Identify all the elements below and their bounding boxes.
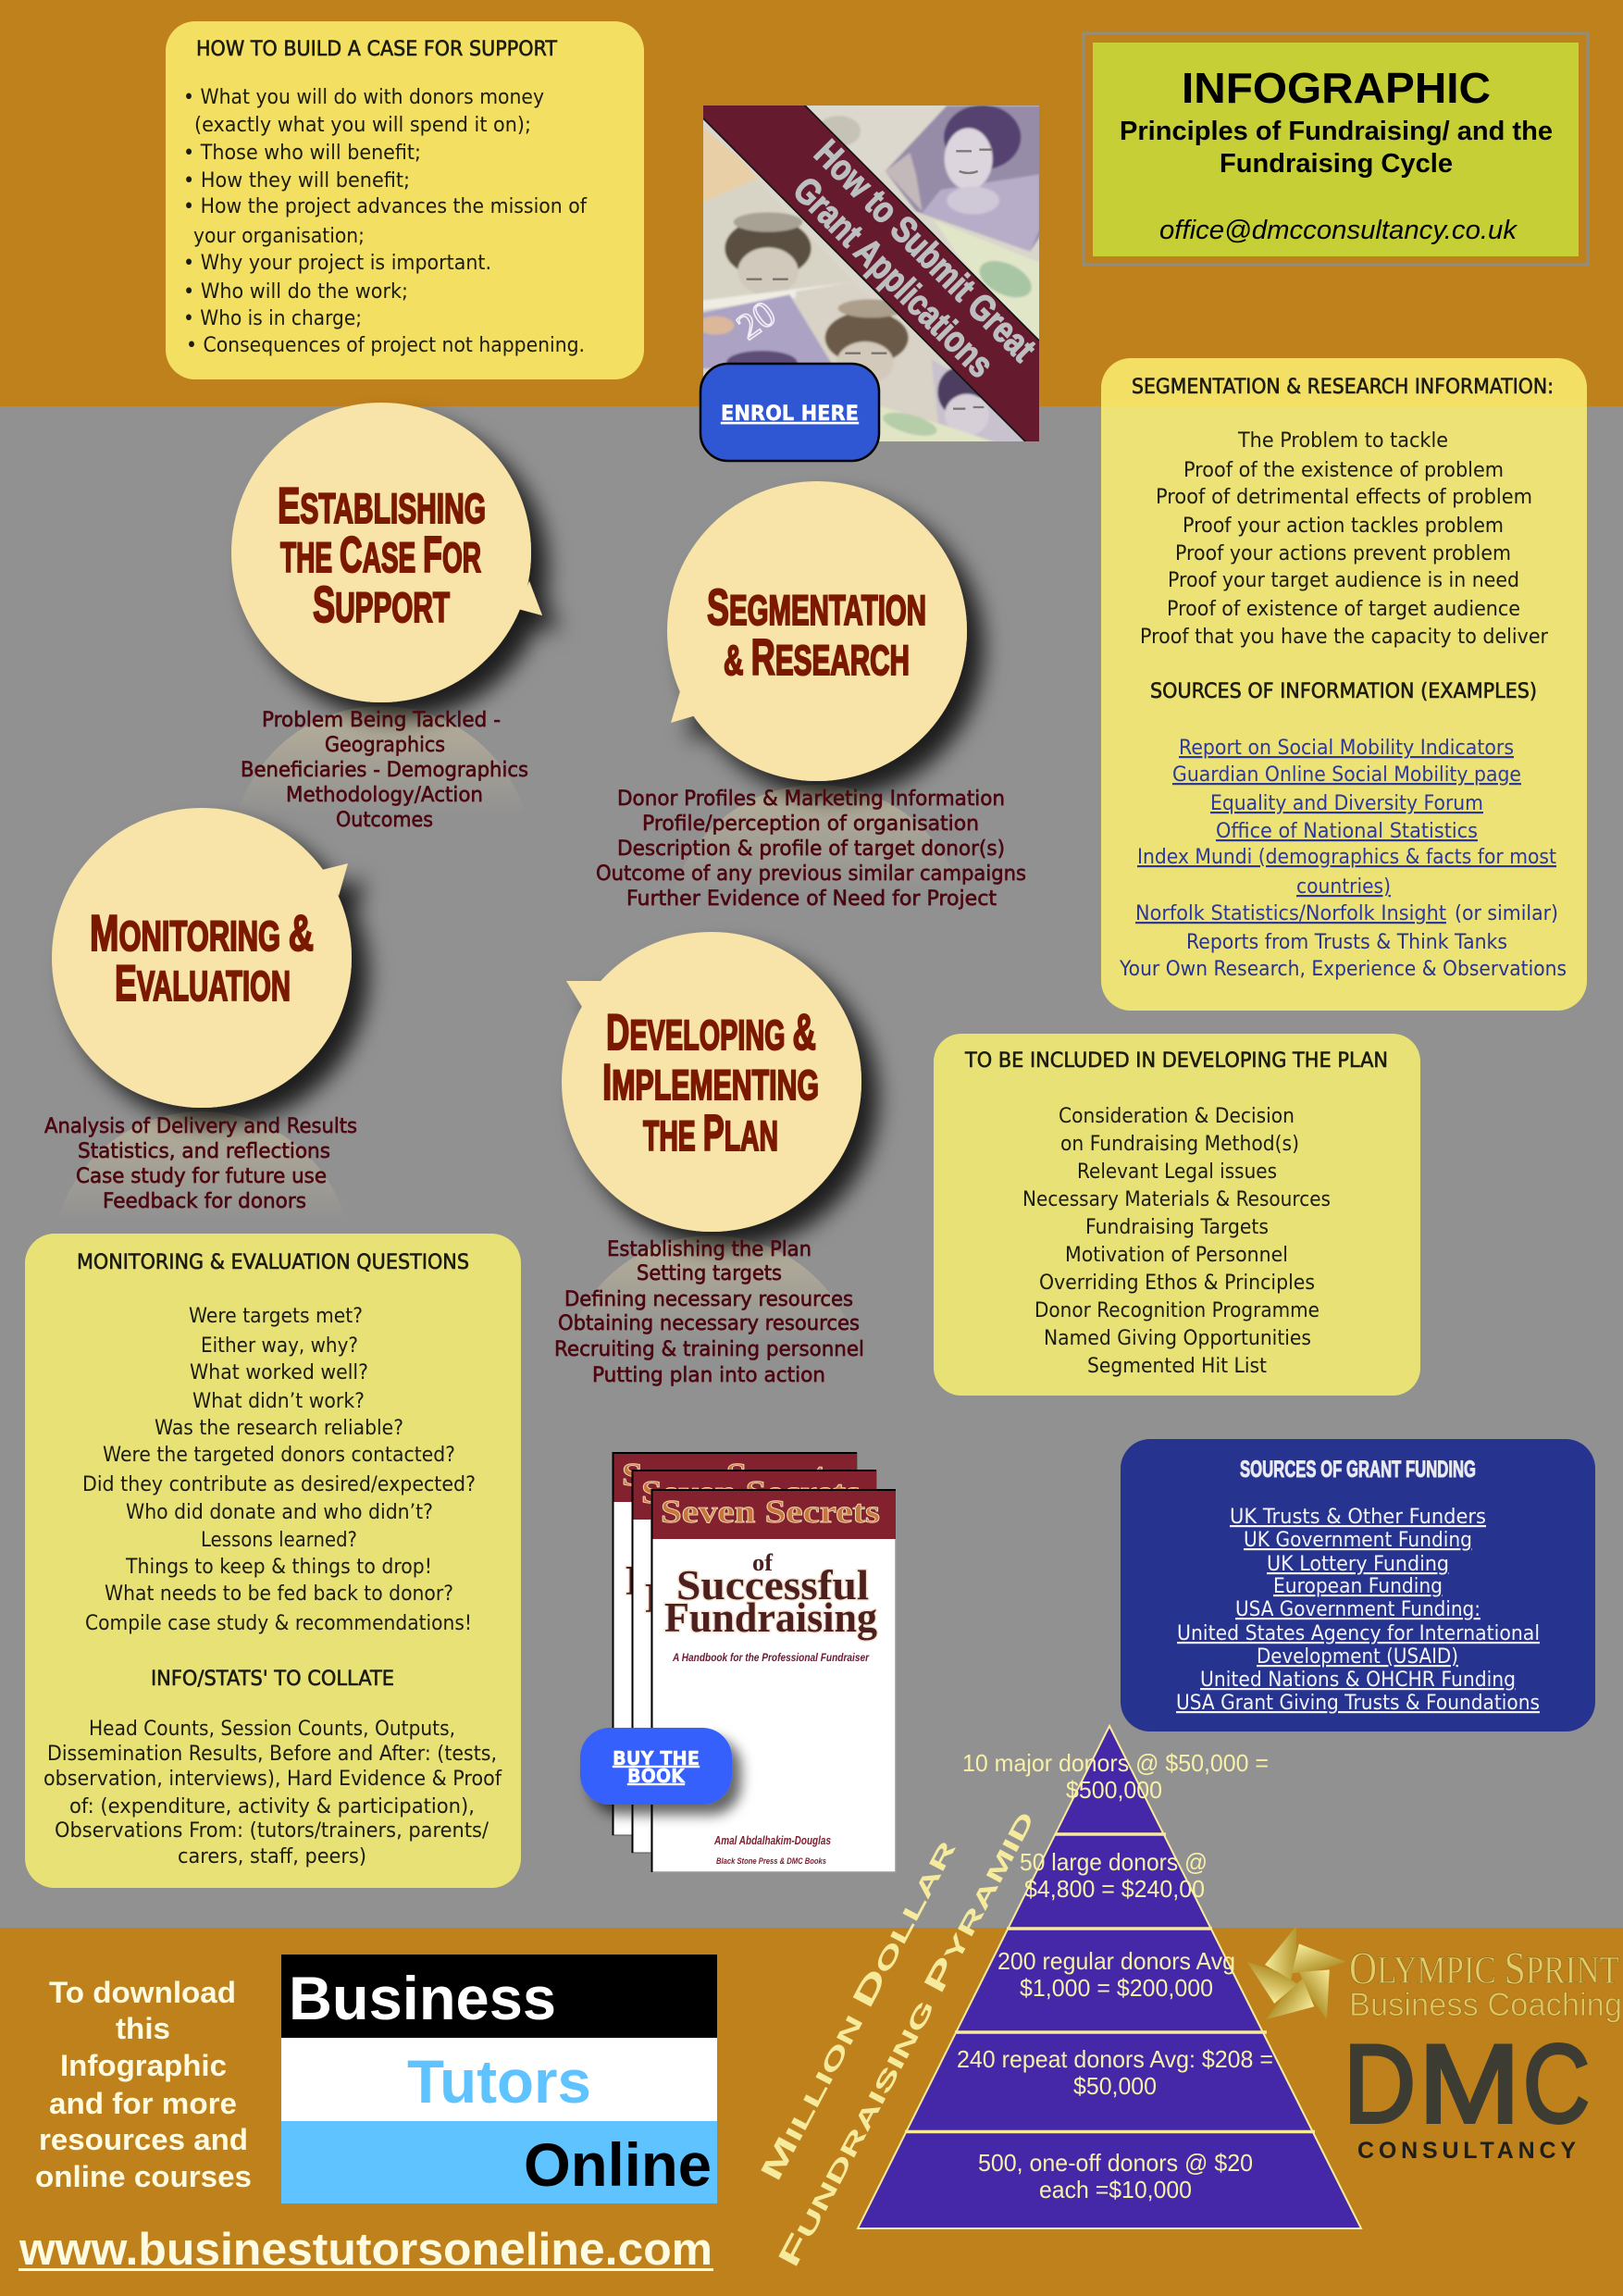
bullet list: • Who is in charge; [183, 307, 362, 330]
bubble title: SUPPORT [313, 576, 450, 633]
letter M: M [1419, 2022, 1520, 2146]
reflection: monitoring circle [52, 1111, 352, 1411]
stats paragraph: Dissemination Results, Before and After: (tests, [47, 1743, 497, 1766]
sources links: Equality and Diversity Forum [1210, 792, 1483, 815]
tier labels: $1,000 = $200,000 [1020, 1974, 1213, 2002]
tier labels: $50,000 [1073, 2072, 1157, 2100]
panel: sources of grant funding [1121, 1439, 1595, 1731]
course image: banknotes with maroon banner [697, 103, 1044, 446]
bubble title [602, 1003, 819, 1161]
questions list: Who did donate and who didn’t? [126, 1501, 433, 1524]
button: enrol here: ENROL HERE [721, 403, 859, 426]
download call to action: To download [49, 1976, 236, 2009]
speech bubble: establishing the case for support [231, 403, 542, 702]
panel heading: TO BE INCLUDED IN DEVELOPING THE PLAN [964, 1049, 1388, 1073]
caption: monitoring and evaluation: Feedback for donors [103, 1190, 306, 1213]
sources heading: SOURCES OF INFORMATION (EXAMPLES) [1150, 680, 1537, 703]
consultancy wordmark: CONSULTANCY [1357, 2138, 1576, 2164]
sources links: Report on Social Mobility Indicators [1179, 737, 1514, 760]
caption: monitoring and evaluation: Analysis of Delivery and Results [44, 1115, 357, 1138]
banner text: How to Submit Great [807, 132, 1044, 369]
bubble title [90, 904, 314, 1011]
button: buy the book: BUY THE [613, 1747, 700, 1769]
book cover: front copy: Successful [676, 1561, 869, 1608]
rotated pyramid title [753, 1805, 1041, 2272]
funding links: European Funding [1273, 1575, 1443, 1598]
caption: developing and implementing the plan: Recruiting & training personnel [554, 1338, 864, 1361]
funding links: UK Trusts & Other Funders [1230, 1506, 1486, 1529]
panel: segmentation and research information [1101, 358, 1587, 1011]
caption: establishing the case for support: Problem Being Tackled - [262, 709, 501, 732]
book cover: middle copy: Fundraising [645, 1574, 858, 1621]
questions list: What didn’t work? [192, 1390, 365, 1413]
bubble title: SEGMENTATION [707, 578, 926, 636]
stats paragraph [43, 1718, 502, 1868]
plan list: Donor Recognition Programme [1035, 1299, 1319, 1322]
tier labels: $500,000 [1066, 1776, 1162, 1804]
bubble title: EVALUATION [115, 954, 291, 1011]
book cover: front copy: of [752, 1549, 773, 1576]
caption: developing and implementing the plan: Obtaining necessary resources [558, 1312, 860, 1335]
logo: olympic sprint business coaching [1237, 1926, 1622, 2038]
proof list: Proof your actions prevent problem [1175, 542, 1511, 565]
funding links: Development (USAID) [1257, 1645, 1458, 1669]
download call to action: resources and [39, 2123, 248, 2156]
stats heading: INFO/STATS' TO COLLATE [151, 1668, 394, 1691]
download call to action: and for more [49, 2087, 237, 2120]
proof list: Proof your target audience is in need [1168, 569, 1519, 592]
download call to action: online courses [35, 2160, 252, 2193]
book cover: front copy: Seven Secrets [661, 1494, 880, 1530]
plan list: Consideration & Decision [1059, 1105, 1295, 1128]
panel: monitoring and evaluation questions [25, 1234, 521, 1888]
caption: monitoring and evaluation: Case study for future use [76, 1165, 327, 1188]
funding links: United Nations & OHCHR Funding [1200, 1669, 1516, 1692]
download call to action: this [116, 2012, 170, 2045]
sources links: Index Mundi (demographics & facts for most [1137, 846, 1556, 869]
book cover: front copy: A Handbook for the Professional Fundraiser [672, 1653, 869, 1664]
bullet list: • Those who will benefit; [183, 142, 421, 165]
caption: establishing the case for support: Outcomes [336, 809, 433, 832]
panel: how to build a case for support [166, 21, 644, 379]
banner text: Grant Applications [786, 169, 1001, 386]
caption: segmentation and research: Description & profile of target donor(s) [617, 838, 1005, 861]
questions list: What worked well? [190, 1361, 368, 1384]
caption: monitoring and evaluation: Statistics, and reflections [78, 1140, 330, 1163]
questions list: Either way, why? [201, 1334, 358, 1358]
caption: developing and implementing the plan: Setting targets [637, 1262, 782, 1285]
proof list: Proof your action tackles problem [1183, 515, 1504, 538]
plan list: Overriding Ethos & Principles [1039, 1272, 1315, 1295]
logo: olympic sprint business coaching: Business Coaching [1349, 1987, 1622, 2023]
sources links: (or similar) [1455, 902, 1558, 925]
panel heading: SEGMENTATION & RESEARCH INFORMATION: [1132, 376, 1554, 399]
plan list: Named Giving Opportunities [1044, 1327, 1311, 1350]
reflection: segmentation circle [667, 785, 967, 1085]
caption: monitoring and evaluation [44, 1115, 357, 1213]
funding links: UK Government Funding [1244, 1529, 1472, 1552]
caption: segmentation and research: Profile/perception of organisation [642, 813, 979, 836]
stats paragraph: observation, interviews), Hard Evidence & Proof [43, 1768, 502, 1791]
sources links [1119, 737, 1567, 981]
tier labels: 10 major donors @ $50,000 = [962, 1749, 1269, 1777]
caption: establishing the case for support: Beneficiaries - Demographics [241, 759, 528, 782]
book cover: middle copy [632, 1471, 876, 1853]
book cover: middle copy: Seven Secrets [641, 1474, 861, 1510]
stats paragraph: of: (expenditure, activity & participation), [69, 1795, 475, 1818]
bubble title: MONITORING & [90, 904, 314, 962]
logo: business tutors online: Online [524, 2130, 712, 2199]
background: orange bottom band [0, 1928, 1623, 2296]
proof list: The Problem to tackle [1237, 429, 1448, 453]
book cover: front copy: Fundraising [664, 1594, 877, 1641]
download call to action [35, 1976, 252, 2193]
plan list: on Fundraising Method(s) [1060, 1133, 1299, 1156]
banknote collage [697, 103, 1043, 446]
bullet list: • How the project advances the mission of [183, 195, 588, 218]
book cover: back copy [613, 1453, 857, 1835]
funding links: USA Grant Giving Trusts & Foundations [1176, 1692, 1540, 1715]
bullet list: • Why your project is important. [183, 252, 491, 275]
button: buy the book: BOOK [627, 1765, 686, 1787]
caption: establishing the case for support [241, 709, 528, 832]
caption: developing and implementing the plan: Establishing the Plan [607, 1238, 812, 1261]
reflection: establishing circle [231, 706, 531, 1006]
tier labels [957, 1749, 1273, 2203]
proof list: Proof of the existence of problem [1183, 459, 1504, 482]
sources links: countries) [1296, 875, 1391, 899]
logo: dmc consultancy [1344, 2022, 1590, 2164]
website address: www.businestutorsoneline.com [19, 2225, 712, 2275]
caption: establishing the case for support: Methodology/Action [286, 784, 483, 807]
stats paragraph: Head Counts, Session Counts, Outputs, [89, 1718, 455, 1741]
bullet list: • What you will do with donors money [183, 86, 544, 109]
bubble title: DEVELOPING & [606, 1003, 816, 1061]
questions list: Did they contribute as desired/expected? [82, 1473, 476, 1496]
note details: facial features [747, 150, 992, 409]
book cover: front copy: Amal Abdalhakim-Douglas [713, 1834, 831, 1847]
stats paragraph: carers, staff, peers) [178, 1845, 366, 1868]
subtitle [1120, 117, 1553, 179]
plan list: Motivation of Personnel [1065, 1244, 1288, 1267]
bullet list: • Consequences of project not happening. [186, 334, 585, 357]
icon: gold pinwheel [1237, 1926, 1352, 2038]
proof list: Proof that you have the capacity to deliver [1140, 626, 1549, 649]
rotated pyramid title: MILLION DOLLAR [753, 1834, 962, 2186]
bubble title: THE PLAN [643, 1104, 778, 1161]
proof list: Proof of existence of target audience [1167, 598, 1520, 621]
questions list: Things to keep & things to drop! [125, 1556, 432, 1579]
plan list [1022, 1105, 1331, 1378]
panel: to be included in developing the plan [934, 1034, 1420, 1396]
million dollar pyramid [858, 1726, 1361, 2228]
tier labels: 500, one-off donors @ $20 [978, 2149, 1253, 2177]
bubble title: THE CASE FOR [280, 526, 481, 583]
funding links: UK Lottery Funding [1267, 1553, 1449, 1576]
questions list: What needs to be fed back to donor? [105, 1582, 453, 1606]
questions list: Was the research reliable? [155, 1417, 403, 1440]
logo: business tutors online: Business [289, 1964, 556, 2032]
stats paragraph: Observations From: (tutors/trainers, parents/ [55, 1819, 489, 1843]
plan list: Segmented Hit List [1087, 1355, 1267, 1378]
funding links [1176, 1506, 1540, 1715]
sources links: Reports from Trusts & Think Tanks [1186, 931, 1507, 954]
questions list [82, 1305, 476, 1635]
title panel [1084, 33, 1588, 265]
caption: segmentation and research: Outcome of any previous similar campaigns [596, 863, 1026, 886]
questions list: Lessons learned? [201, 1529, 357, 1552]
title: INFOGRAPHIC [1182, 64, 1491, 112]
maroon banner [703, 105, 1039, 441]
plan list: Relevant Legal issues [1077, 1160, 1277, 1184]
tier labels: $4,800 = $240,00 [1024, 1875, 1205, 1903]
button: buy the book [580, 1728, 732, 1805]
bubble title [707, 578, 926, 686]
tier labels: 50 large donors @ [1020, 1848, 1208, 1876]
panel heading: SOURCES OF GRANT FUNDING [1240, 1457, 1476, 1483]
caption: developing and implementing the plan [554, 1238, 864, 1387]
panel heading: MONITORING & EVALUATION QUESTIONS [77, 1251, 469, 1274]
speech bubble: monitoring and evaluation [52, 808, 352, 1108]
bubble title: IMPLEMENTING [602, 1053, 819, 1111]
sources links: Norfolk Statistics/Norfolk Insight [1135, 902, 1446, 925]
bubble title: & RESEARCH [724, 628, 910, 686]
questions list: Compile case study & recommendations! [85, 1612, 472, 1635]
caption: segmentation and research: Further Evidence of Need for Project [626, 887, 997, 911]
sources links: Guardian Online Social Mobility page [1172, 763, 1521, 787]
funding links: USA Government Funding: [1235, 1598, 1481, 1621]
plan list: Necessary Materials & Resources [1022, 1188, 1331, 1211]
tier labels: 240 repeat donors Avg: $208 = [957, 2045, 1273, 2073]
background: orange top band [0, 0, 1623, 406]
download call to action: Infographic [60, 2049, 227, 2082]
book cover: back copy: Seven Secrets [622, 1457, 841, 1493]
contact email: office@dmcconsultancy.co.uk [1159, 216, 1518, 245]
letter D: D [1344, 2022, 1416, 2146]
subtitle: Fundraising Cycle [1220, 149, 1453, 179]
reflection: developing circle [562, 1235, 861, 1535]
sources links: Office of National Statistics [1216, 820, 1478, 843]
questions list: Were targets met? [189, 1305, 363, 1328]
caption: developing and implementing the plan: Putting plan into action [592, 1364, 825, 1387]
bullet list: • How they will benefit; [183, 169, 410, 192]
caption: segmentation and research: Donor Profiles & Marketing Information [617, 788, 1005, 811]
logo: business tutors online [281, 1955, 717, 2203]
funding links: United States Agency for International [1177, 1622, 1540, 1645]
speech bubble: segmentation and research [667, 481, 967, 781]
button: enrol here [700, 364, 879, 461]
tier labels: each =$10,000 [1039, 2176, 1192, 2203]
bullet list: (exactly what you will spend it on); [194, 114, 531, 137]
bullet list: your organisation; [193, 225, 365, 248]
letter C: C [1523, 2022, 1590, 2146]
book cover: front copy: Black Stone Press & DMC Books [716, 1856, 826, 1867]
proof list: Proof of detrimental effects of problem [1156, 486, 1532, 509]
sources links: Your Own Research, Experience & Observations [1119, 958, 1567, 981]
note details: denomination: 20 [729, 292, 783, 348]
plan list: Fundraising Targets [1085, 1216, 1269, 1239]
speech bubble: developing and implementing the plan [562, 932, 861, 1232]
questions list: Were the targeted donors contacted? [103, 1444, 455, 1467]
subtitle: Principles of Fundraising/ and the [1120, 117, 1553, 146]
tier labels: 200 regular donors Avg [997, 1947, 1235, 1975]
bubble title: ESTABLISHING [278, 477, 486, 534]
bullet list: • Who will do the work; [183, 280, 408, 304]
caption: segmentation and research [596, 788, 1026, 911]
bubble title [278, 477, 486, 633]
banner text [796, 138, 1036, 378]
book cover: front copy [651, 1490, 896, 1872]
rotated pyramid title: FUNDRAISING PYRAMID [771, 1805, 1041, 2272]
caption: establishing the case for support: Geographics [325, 734, 445, 757]
proof list [1140, 429, 1549, 649]
logo: business tutors online: Tutors [407, 2047, 591, 2116]
bullet list [183, 86, 588, 357]
caption: developing and implementing the plan: Defining necessary resources [564, 1288, 853, 1311]
panel heading: HOW TO BUILD A CASE FOR SUPPORT [196, 38, 558, 61]
book cover: back copy: Fundraising [626, 1557, 838, 1604]
